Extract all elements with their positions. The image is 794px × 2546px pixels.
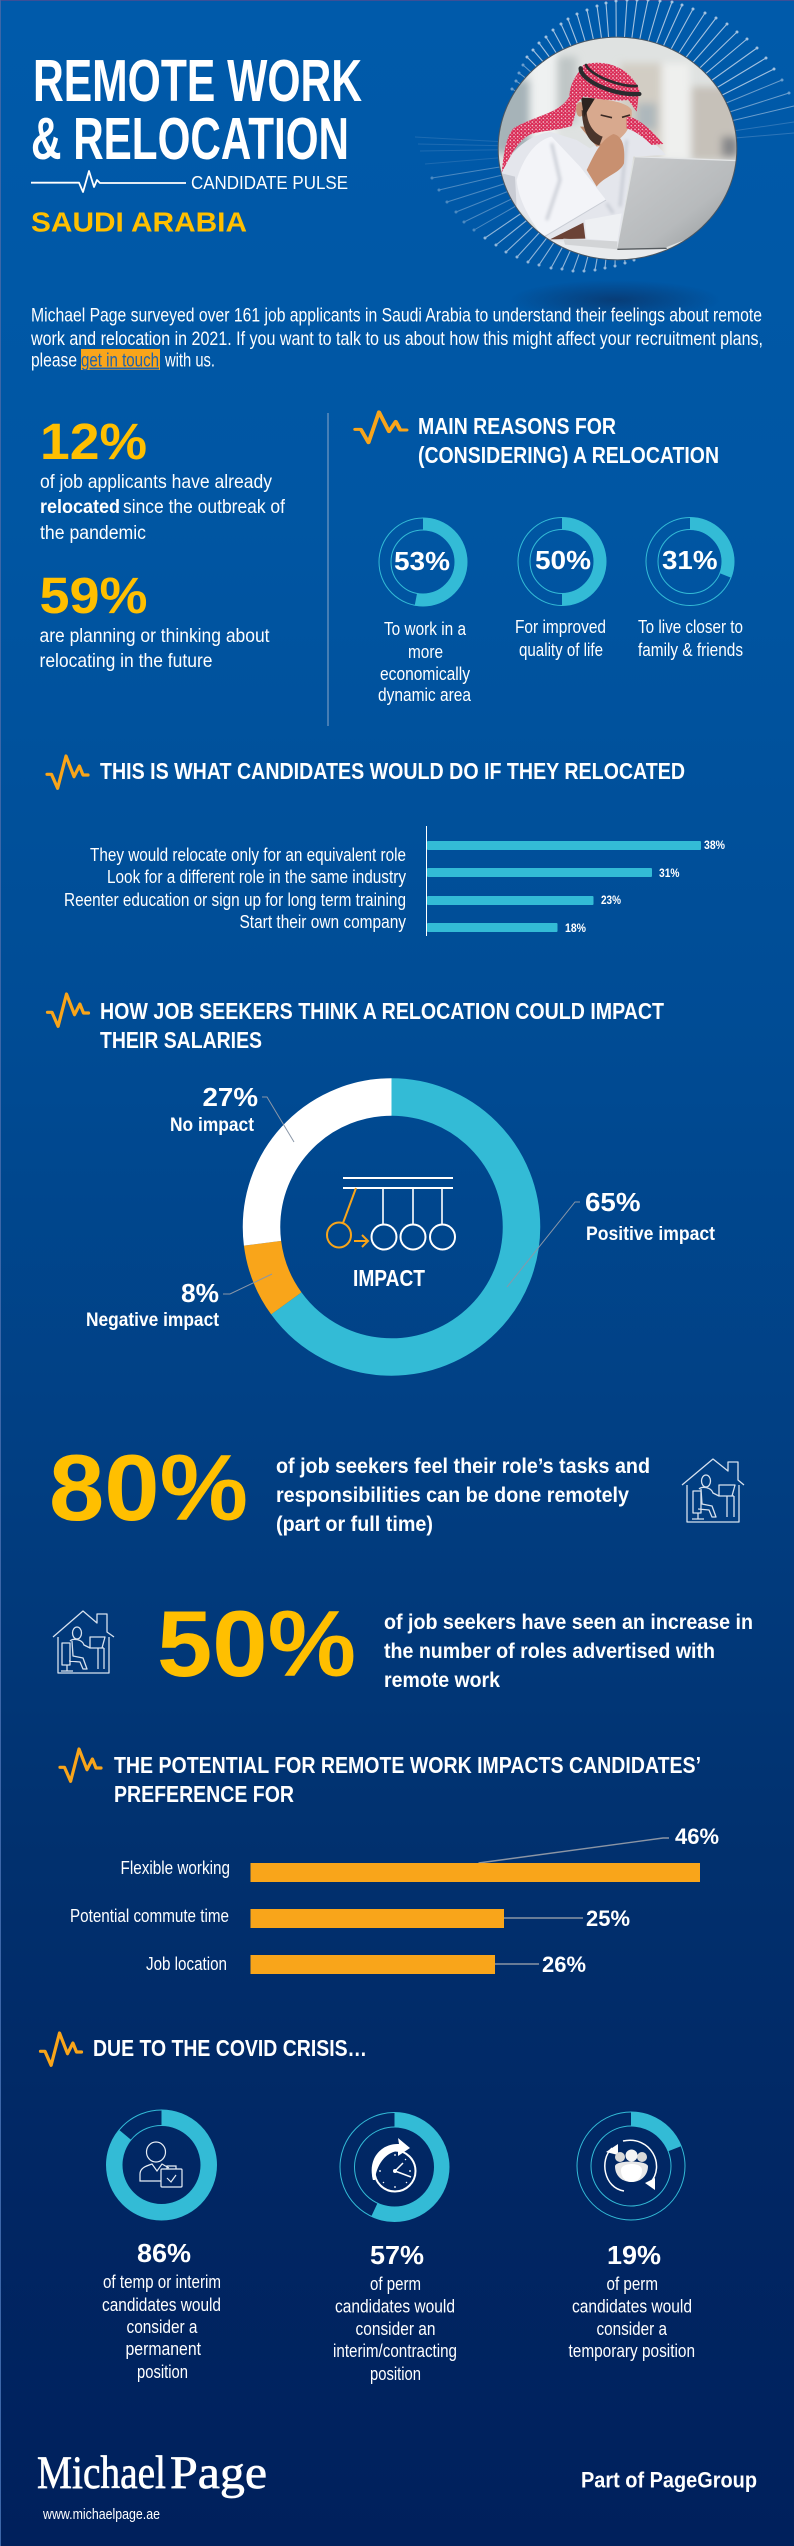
icon: pulse <box>47 756 88 788</box>
stat: 12% relocated: of job applicants have already <box>40 471 272 493</box>
stat: 80% remote: 80% <box>49 1435 248 1540</box>
title <box>31 47 362 172</box>
bar: different role <box>107 867 680 887</box>
title: & RELOCATION <box>31 105 349 172</box>
stat: 12% relocated: 12% <box>40 413 147 470</box>
radial tick ring <box>415 0 794 271</box>
country heading: SAUDI ARABIA <box>31 206 247 238</box>
icon: pulse <box>40 2033 82 2065</box>
bar: job location <box>146 1952 586 1977</box>
donut centre label: IMPACT <box>353 1265 425 1291</box>
text: 19%: candidates would <box>572 2296 692 2316</box>
stat: 50% roles advertised <box>157 1591 753 1696</box>
subtitle: candidate pulse: CANDIDATE PULSE <box>191 173 348 193</box>
icon: person with briefcase <box>140 2142 182 2187</box>
heading: main reasons: MAIN REASONS FOR <box>418 413 616 439</box>
text: 57%: consider an <box>356 2319 436 2339</box>
bar: job location: 26% <box>542 1952 586 1977</box>
bar: flexible working: Flexible working <box>120 1858 230 1878</box>
stat: 12% relocated: relocated <box>40 496 120 518</box>
icon: pulse <box>60 1749 101 1781</box>
bar: commute time: 25% <box>586 1906 630 1931</box>
stat: 50% roles advertised: remote work <box>384 1669 500 1692</box>
donut: 53%: 53% <box>394 546 450 576</box>
stat: 50% roles advertised: 50% <box>157 1591 356 1696</box>
label: 53%: more <box>408 642 443 662</box>
heading: main reasons <box>355 412 719 468</box>
title: REMOTE WORK <box>33 47 362 114</box>
label: 53%: economically <box>380 664 470 684</box>
heading: covid crisis <box>40 2033 367 2065</box>
text: 57%: of perm <box>370 2274 421 2294</box>
text: 86%: permanent <box>126 2339 201 2359</box>
heading: remote preference: THE POTENTIAL FOR REMOTE WORK IMPACTS CANDIDATES’ <box>114 1752 701 1778</box>
text: 86%: consider a <box>126 2317 198 2337</box>
icon: home office <box>53 1611 114 1673</box>
heading: what candidates would do: THIS IS WHAT CANDIDATES WOULD DO IF THEY RELOCATED <box>100 758 685 784</box>
heading: remote preference <box>60 1749 701 1807</box>
bar: different role: Look for a different role in the same industry <box>107 867 406 887</box>
bar: commute time: Potential commute time <box>70 1906 229 1926</box>
text: 19%: 19% <box>607 2240 661 2270</box>
heading: main reasons: (CONSIDERING) A RELOCATION <box>418 442 719 468</box>
bar chart: if they relocated <box>64 826 725 936</box>
text: 19%: consider a <box>596 2319 668 2339</box>
text: 57%: candidates would <box>335 2296 455 2316</box>
bar: equivalent role: They would relocate only for an equivalent role <box>90 845 406 865</box>
stat: 12% relocated <box>40 413 286 544</box>
icon: pulse <box>48 994 88 1026</box>
label: 50%: For improved <box>515 617 606 637</box>
intro paragraph: get in touch <box>81 350 159 372</box>
donut: 31%: 31% <box>662 545 718 575</box>
label: 31%: family & friends <box>638 640 743 660</box>
bar: job location: Job location <box>146 1954 227 1974</box>
donut: 50%: 50% <box>535 545 591 575</box>
stat: 12% relocated: since the outbreak of <box>123 496 286 518</box>
label: 31%: To live closer to <box>638 617 743 637</box>
bar: different role: 31% <box>659 868 680 880</box>
text: 57%: position <box>370 2364 421 2384</box>
label: 8% negative impact <box>86 1278 219 1331</box>
donut: 19% <box>577 2112 685 2220</box>
label: 50% <box>515 617 606 660</box>
label: 27% no impact: 27% <box>202 1082 258 1112</box>
stat: 50% roles advertised: the number of roles advertised with <box>384 1640 715 1663</box>
label: 65% positive impact: Positive impact <box>586 1223 715 1245</box>
donut chart: salary impact <box>223 1097 580 1357</box>
icon: home office <box>682 1459 744 1522</box>
photo: man in keffiyeh at laptop <box>493 33 743 267</box>
logo: Michael Page: Page <box>170 2447 267 2499</box>
heading: covid crisis: DUE TO THE COVID CRISIS… <box>93 2035 367 2061</box>
stat: 50% roles advertised: of job seekers have seen an increase in <box>384 1611 753 1634</box>
stat: 80% remote: responsibilities can be done remotely <box>276 1484 629 1507</box>
label: 65% positive impact: 65% <box>585 1187 640 1217</box>
bar: own company <box>240 912 586 935</box>
text: 86%: 86% <box>137 2238 191 2268</box>
bar: own company: 18% <box>565 923 586 935</box>
stat: 80% remote: of job seekers feel their role’s tasks and <box>276 1455 650 1478</box>
website url: www.michaelpage.ae <box>42 2506 160 2523</box>
label: 53%: To work in a <box>384 619 467 639</box>
bar: education: Reenter education or sign up for long term training <box>64 890 406 910</box>
text: 86%: position <box>137 2362 188 2382</box>
stat: 59% planning: 59% <box>40 567 148 624</box>
label: 27% no impact <box>170 1082 258 1136</box>
intro paragraph <box>30 304 763 372</box>
label: 27% no impact: No impact <box>170 1114 254 1136</box>
bar: education: 23% <box>601 895 621 907</box>
bar: flexible working <box>120 1824 719 1882</box>
text: 86%: candidates would <box>102 2295 221 2315</box>
bar: flexible working: 46% <box>675 1824 719 1849</box>
label: 53%: dynamic area <box>378 685 472 705</box>
text: 57%: 57% <box>370 2240 424 2270</box>
bar chart: remote preference <box>70 1824 719 1977</box>
stat: 59% planning: are planning or thinking about <box>40 625 270 647</box>
heading: salary impact <box>48 994 664 1053</box>
donut: 31% <box>646 518 734 606</box>
icon: clock with arrow <box>372 2138 416 2192</box>
stat: 80% remote: (part or full time) <box>276 1513 433 1536</box>
heading: salary impact: THEIR SALARIES <box>100 1027 262 1053</box>
stat: 12% relocated: the pandemic <box>40 522 146 544</box>
logo: Michael Page: Michael <box>37 2447 166 2499</box>
stat: 80% remote <box>49 1435 650 1540</box>
label: 8% negative impact: 8% <box>181 1278 219 1308</box>
text: 19%: temporary position <box>568 2341 695 2361</box>
label: 50%: quality of life <box>519 640 603 660</box>
icon: newton's cradle <box>327 1178 455 1250</box>
donut: 50% <box>518 518 606 606</box>
label: 8% negative impact: Negative impact <box>86 1309 219 1331</box>
stat: 59% planning <box>40 567 270 672</box>
heading: salary impact: HOW JOB SEEKERS THINK A RELOCATION COULD IMPACT <box>100 998 664 1024</box>
text: 19%: of perm <box>606 2274 658 2294</box>
donut: 86% <box>106 2110 216 2220</box>
text: 57% <box>333 2240 457 2384</box>
heading: what candidates would do <box>47 756 685 788</box>
soft shadow under photo <box>510 280 720 320</box>
icon: pulse <box>355 412 406 443</box>
label: 31% <box>638 617 743 660</box>
heading: remote preference: PREFERENCE FOR <box>114 1781 294 1807</box>
subtitle: candidate pulse <box>31 171 348 193</box>
bar: equivalent role <box>90 840 725 865</box>
text: 57%: interim/contracting <box>333 2341 457 2361</box>
icon: people with rotating arrows <box>605 2140 657 2191</box>
text: 86% <box>102 2238 221 2382</box>
logo: Michael Page <box>37 2447 267 2499</box>
bar: own company: Start their own company <box>240 912 406 932</box>
donut: 53% <box>379 518 467 606</box>
bar: equivalent role: 38% <box>704 840 725 852</box>
intro paragraph: please <box>31 350 77 372</box>
intro paragraph: with us. <box>164 350 215 372</box>
stat: 59% planning: relocating in the future <box>40 650 212 672</box>
text: 19% <box>568 2240 695 2361</box>
label: 65% positive impact <box>585 1187 715 1245</box>
bar: commute time <box>70 1906 630 1931</box>
label: 53% <box>378 619 472 705</box>
text: 86%: of temp or interim <box>103 2272 221 2292</box>
donut: 57% <box>340 2112 449 2222</box>
part of PageGroup: Part of PageGroup <box>581 2468 757 2492</box>
